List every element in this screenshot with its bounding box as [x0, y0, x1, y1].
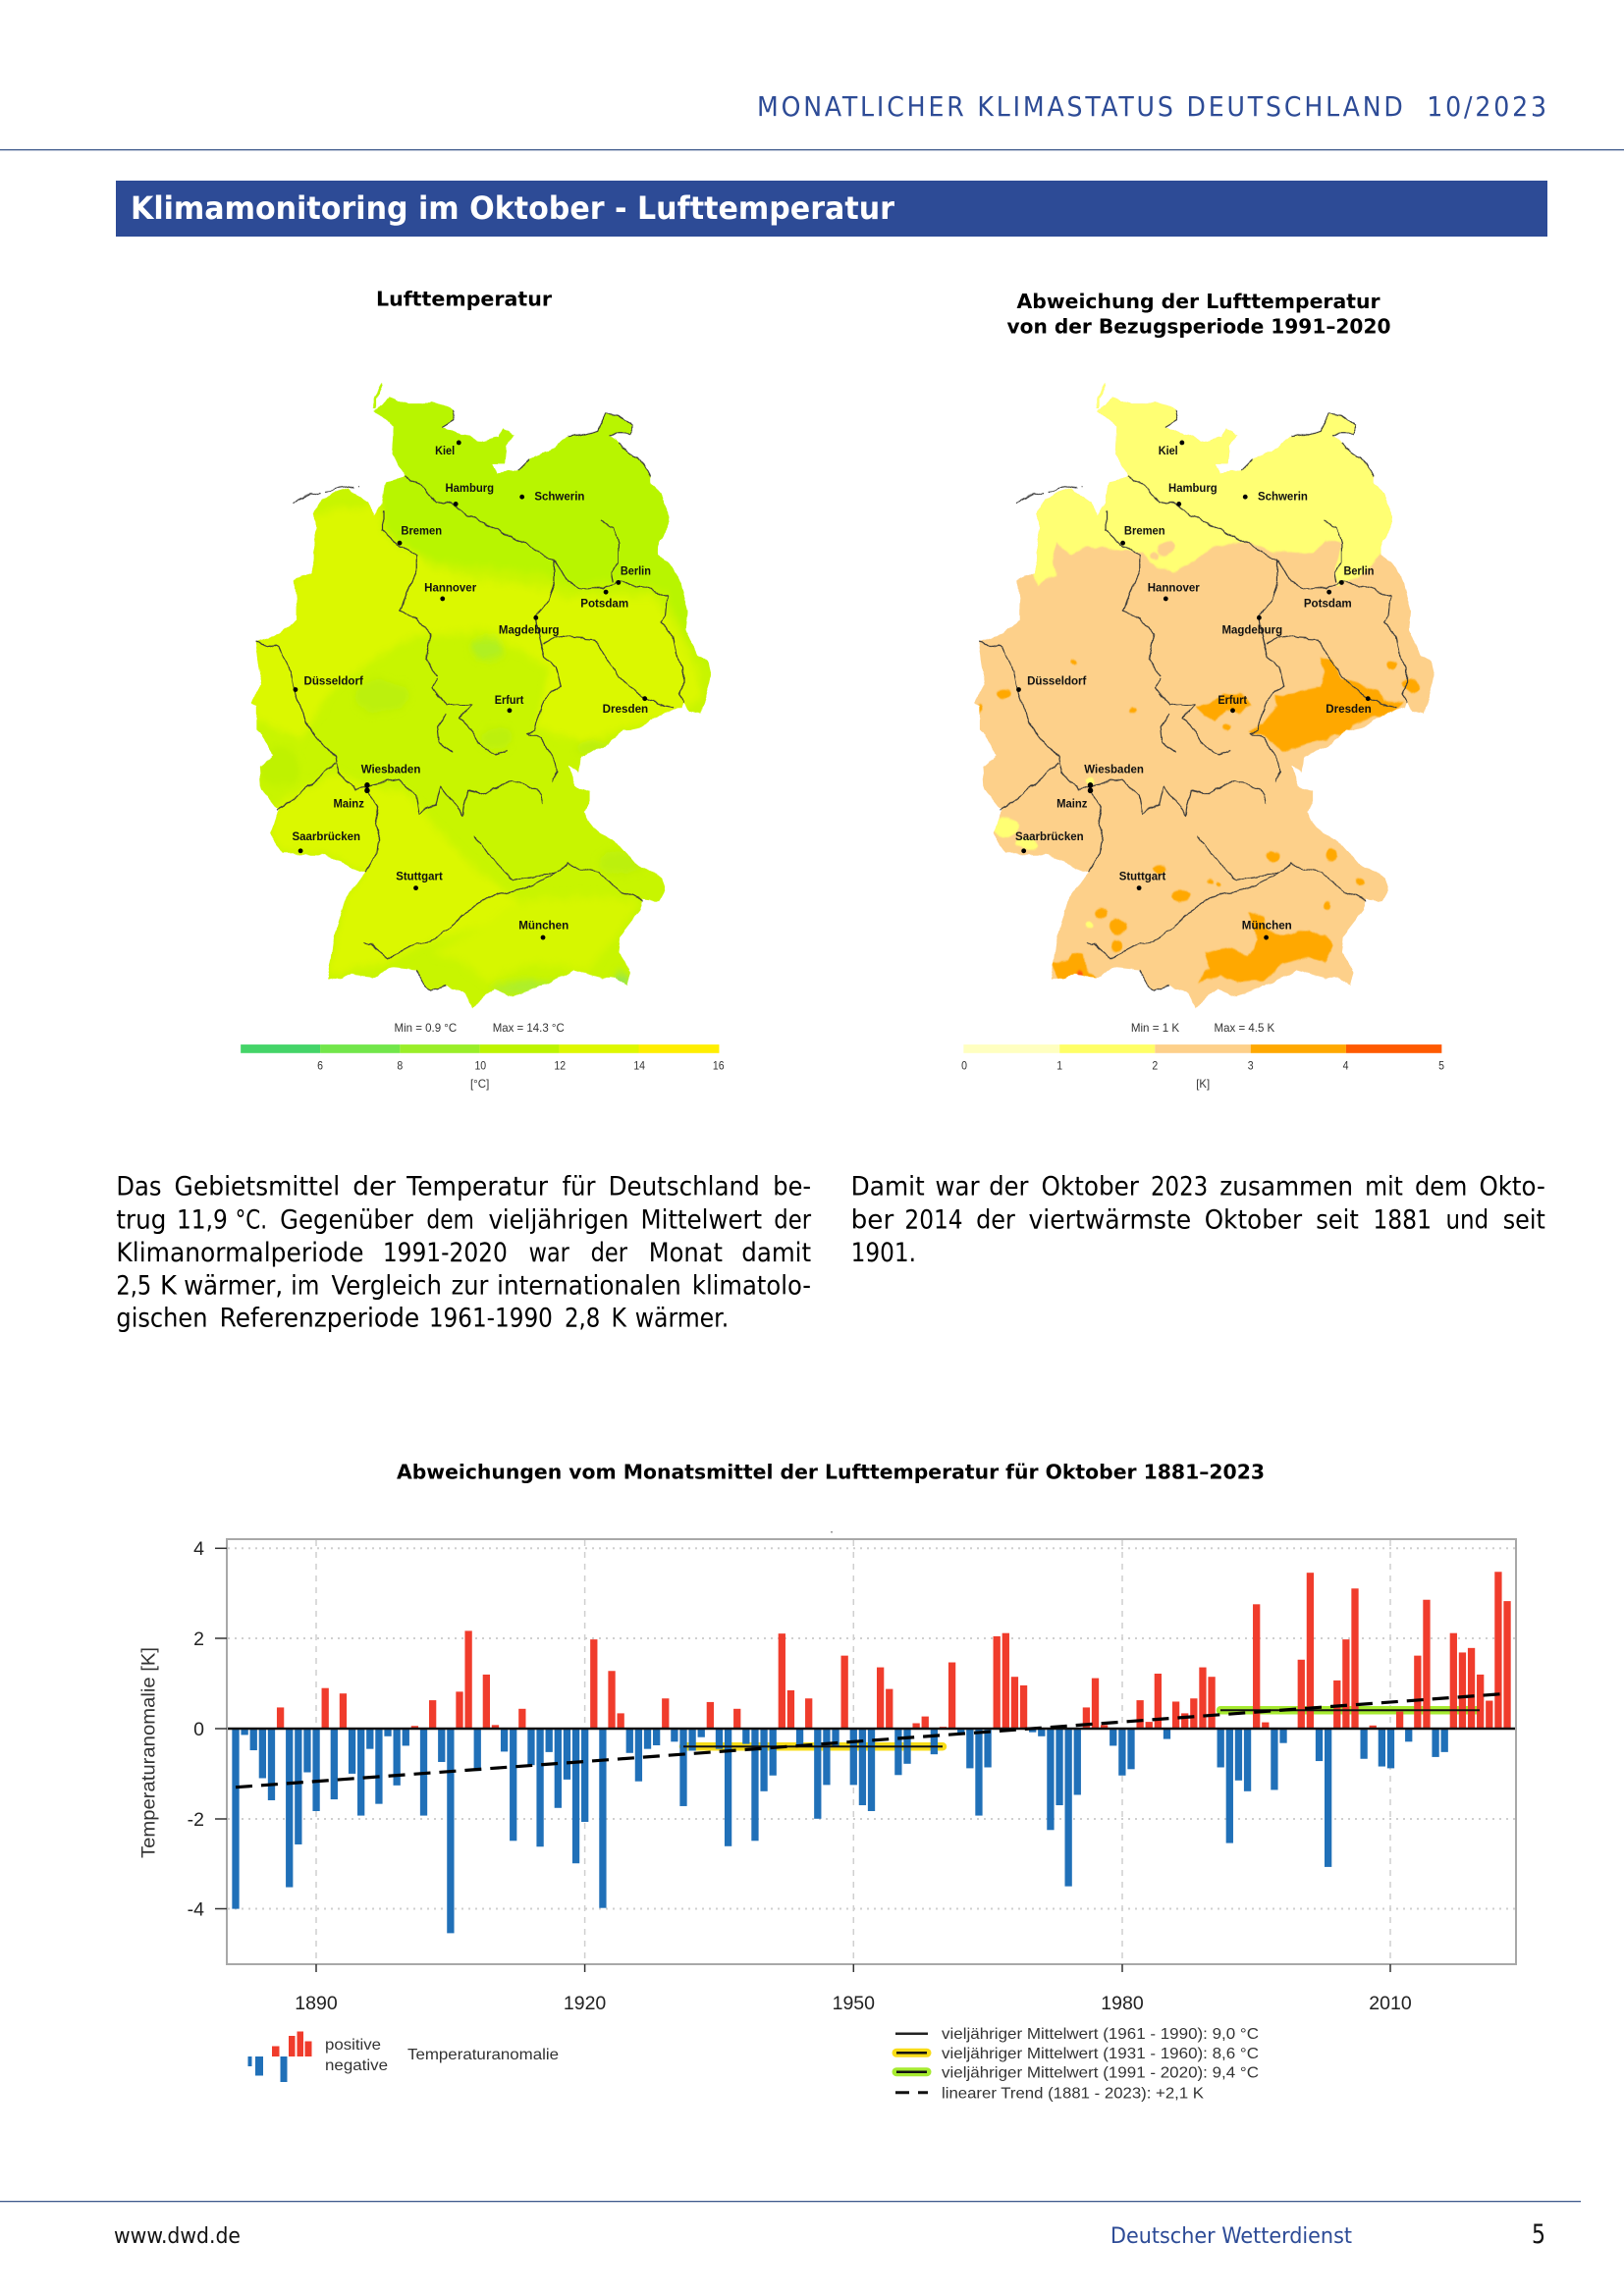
text block: right column: Oktober: [1205, 1204, 1303, 1235]
legend: bar colours: [247, 2032, 559, 2082]
city markers and labels: Düsseldorf: [1027, 674, 1087, 688]
city markers and labels: Düsseldorf: [304, 674, 363, 688]
text block: left column: im: [291, 1270, 319, 1301]
city markers and labels: Magdeburg: [1221, 623, 1282, 637]
city markers and labels: München: [1242, 919, 1292, 933]
city markers and labels: Mainz: [1056, 797, 1087, 811]
map title: Lufttemperatur: Lufttemperatur: [376, 287, 553, 310]
text block: left column: 2,8: [565, 1303, 600, 1333]
text block: left column: 1961-1990: [429, 1303, 553, 1333]
y axis labels: -2: [188, 1809, 204, 1831]
x axis labels: 1980: [1101, 1993, 1144, 2014]
min and max values: Max = 4.5 K: [1215, 1023, 1275, 1035]
text block: left column: Gebietsmittel: [175, 1171, 340, 1201]
text block: left column: Klimanormalperiode: [116, 1238, 363, 1267]
bar chart: temperature anomalies: [139, 1531, 1516, 2014]
city markers and labels: Stuttgart: [1119, 870, 1166, 883]
city markers and labels: Mainz: [334, 797, 364, 811]
city markers and labels: Saarbrücken: [292, 830, 360, 844]
y axis labels: 2: [193, 1629, 204, 1650]
text block: left column: trug: [116, 1204, 166, 1235]
colour scale in degrees Celsius: 6: [317, 1060, 323, 1073]
text block: right column: und: [1446, 1204, 1489, 1235]
text block: left column: 2,5: [116, 1270, 151, 1301]
city markers and labels: Kiel: [1159, 445, 1178, 458]
city markers and labels: Dresden: [603, 703, 648, 717]
text block: right column: seit: [1316, 1204, 1359, 1235]
legend: bar colours: Temperaturanomalie: [407, 2047, 559, 2063]
colour scale in degrees Celsius: [241, 1044, 725, 1092]
colour scale in degrees Celsius: [°C]: [470, 1079, 489, 1092]
axis ticks: [215, 1548, 1390, 1972]
coloured bands behind the long-term means: [683, 1710, 1480, 1746]
section heading bar: [116, 181, 1547, 237]
text block: left column: der: [774, 1204, 812, 1235]
text block: left column: K: [612, 1303, 628, 1333]
legend: bar colours: negative: [325, 2057, 388, 2074]
city markers and labels: Berlin: [621, 564, 651, 578]
text block: right column: 1901.: [851, 1238, 916, 1267]
city markers and labels: Stuttgart: [396, 870, 443, 883]
plot frame: [227, 1539, 1516, 1964]
positive bars: [277, 1572, 1511, 1729]
legend: bar colours: positive: [325, 2037, 381, 2054]
grid lines: [228, 1540, 1515, 1963]
city markers and labels: Kiel: [435, 445, 455, 458]
min and max values: [1131, 1023, 1275, 1035]
min and max values: Max = 14.3 °C: [493, 1023, 565, 1035]
text block: right column: 2023: [1151, 1171, 1208, 1201]
x axis labels: 2010: [1369, 1993, 1412, 2014]
map: temperature deviation: [962, 383, 1443, 1090]
text block: left column: Deutschland: [609, 1171, 760, 1201]
text block: left column: be-: [773, 1171, 811, 1201]
x axis labels: 1890: [295, 1993, 338, 2014]
text block: right column: war: [935, 1171, 980, 1201]
map title: Abweichung: Abweichung der Lufttemperatur: [1017, 290, 1380, 313]
text block: left column: damit: [741, 1238, 811, 1267]
text block: left column: wärmer.: [635, 1303, 729, 1333]
text block: left column: Vergleich: [332, 1270, 442, 1301]
text block: right column: 2014: [904, 1204, 963, 1235]
text block: left column: 1991-2020: [383, 1238, 508, 1267]
map: air temperature: [241, 383, 725, 1090]
min and max values: [394, 1023, 565, 1035]
colour scale in Kelvin: 5: [1438, 1060, 1444, 1073]
text block: left column: war: [529, 1238, 569, 1267]
min and max values: Min = 1 K: [1131, 1023, 1179, 1035]
text block: left column: Referenzperiode: [220, 1303, 419, 1333]
text block: left column: Mittelwert: [641, 1204, 762, 1235]
map title: Abweichung: [1007, 290, 1390, 338]
colour scale in Kelvin: 3: [1248, 1060, 1254, 1073]
colour scale in degrees Celsius: 12: [554, 1060, 567, 1073]
text block: left column: klimatolo-: [692, 1270, 811, 1301]
text block: left column: dem: [426, 1204, 474, 1235]
city markers and labels: Wiesbaden: [1084, 763, 1144, 776]
text block: left column: vieljährigen: [488, 1204, 628, 1235]
text block: right column: mit: [1365, 1171, 1403, 1201]
colour scale in degrees Celsius: 8: [397, 1060, 404, 1073]
legend: reference lines: vieljähriger Mittelwert (1961 - 1990): 9,0 °C: [942, 2026, 1259, 2043]
section heading bar: Klimamonitoring im Oktober - Lufttemperatur: [131, 189, 895, 227]
text block: right column: seit: [1503, 1204, 1545, 1235]
city markers and labels: Magdeburg: [499, 623, 560, 637]
colour scale in Kelvin: 0: [961, 1060, 967, 1073]
footer: [0, 2201, 1581, 2250]
text block: left column: gischen: [116, 1303, 207, 1333]
city markers and labels: München: [518, 919, 568, 933]
text block: right column: Okto-: [1479, 1171, 1545, 1201]
text block: left column: wärmer,: [184, 1270, 283, 1301]
city markers and labels: Hamburg: [446, 481, 494, 495]
city markers and labels: Saarbrücken: [1015, 830, 1084, 844]
text block: right column: der: [989, 1171, 1029, 1201]
x axis labels: [295, 1993, 1412, 2014]
city markers and labels: Schwerin: [1258, 490, 1308, 504]
min and max values: Min = 0.9 °C: [394, 1023, 457, 1035]
footer: 5: [1532, 2219, 1545, 2250]
colour scale in Kelvin: [K]: [1196, 1079, 1210, 1092]
colour scale in degrees Celsius: 10: [474, 1060, 487, 1073]
city markers and labels: Hamburg: [1168, 481, 1218, 495]
map title: Abweichung: von der Bezugsperiode 1991–2020: [1007, 314, 1390, 338]
city markers and labels: Wiesbaden: [361, 763, 420, 776]
negative bars: [232, 1729, 1448, 1933]
text block: left column: Monat: [649, 1238, 723, 1267]
city markers and labels: Potsdam: [580, 597, 628, 611]
x axis labels: 1920: [564, 1993, 606, 2014]
city markers and labels: Potsdam: [1304, 597, 1352, 611]
city markers and labels: Erfurt: [1218, 694, 1247, 708]
zero line: [227, 1728, 1516, 1730]
legend: reference lines: linearer Trend (1881 - 2023): +2,1 K: [942, 2085, 1204, 2103]
text block: left column: Gegenüber: [280, 1204, 413, 1235]
text block: left column: Temperatur: [406, 1171, 549, 1201]
city markers and labels: Hannover: [1148, 581, 1200, 595]
linear trend: [236, 1693, 1506, 1788]
chart title: Abweichungen vom Monatsmittel der Lufttemperatur für Oktober 1881–2023: [397, 1461, 1265, 1484]
footer: Deutscher Wetterdienst: [1110, 2224, 1352, 2249]
text block: right column: [851, 1171, 1545, 1267]
city markers and labels: Hannover: [424, 581, 476, 595]
text block: left column: der: [352, 1171, 396, 1201]
colour scale in Kelvin: 4: [1343, 1060, 1349, 1073]
y axis labels: [188, 1538, 204, 1920]
text block: right column: Oktober: [1042, 1171, 1139, 1201]
legend: reference lines: [895, 2026, 1259, 2103]
text block: left column: internationalen: [497, 1270, 681, 1301]
text block: right column: zusammen: [1219, 1171, 1353, 1201]
text block: left column: Das: [116, 1171, 161, 1201]
colour scale in Kelvin: 1: [1056, 1060, 1063, 1073]
header: publication title: MONATLICHER KLIMASTATUS DEUTSCHLAND 10/2023: [757, 90, 1546, 123]
city markers and labels: [292, 441, 651, 939]
colour scale in degrees Celsius: 16: [713, 1060, 725, 1073]
city markers and labels: Bremen: [401, 524, 442, 538]
text block: left column: K: [160, 1270, 179, 1301]
text block: left column: für: [563, 1171, 596, 1201]
city markers and labels: Dresden: [1326, 703, 1372, 717]
y axis labels: 0: [193, 1719, 204, 1740]
y axis title: Temperaturanomalie [K]: [139, 1647, 159, 1858]
y axis labels: 4: [193, 1538, 204, 1560]
colour scale in Kelvin: [961, 1044, 1444, 1092]
text block: right column: 1881: [1373, 1204, 1432, 1235]
city markers and labels: Berlin: [1343, 564, 1374, 578]
text block: right column: dem: [1415, 1171, 1467, 1201]
text block: right column: viertwärmste: [1028, 1204, 1191, 1235]
text block: left column: 11,9: [177, 1204, 228, 1235]
long-term mean lines: [683, 1710, 1480, 1746]
city markers and labels: Schwerin: [534, 490, 584, 504]
footer: www.dwd.de: [114, 2224, 241, 2249]
text block: left column: zur: [452, 1270, 489, 1301]
y axis labels: -4: [188, 1898, 204, 1920]
city markers and labels: Bremen: [1124, 524, 1165, 538]
colour scale in degrees Celsius: 14: [633, 1060, 645, 1073]
city markers and labels: [1015, 441, 1374, 939]
text block: left column: °C.: [236, 1204, 267, 1235]
legend: reference lines: vieljähriger Mittelwert (1991 - 2020): 9,4 °C: [942, 2065, 1259, 2081]
text block: left column: der: [591, 1238, 627, 1267]
legend: reference lines: vieljähriger Mittelwert (1931 - 1960): 8,6 °C: [942, 2046, 1259, 2062]
city markers and labels: Erfurt: [495, 694, 524, 708]
colour scale in Kelvin: 2: [1152, 1060, 1159, 1073]
text block: right column: Damit: [851, 1171, 925, 1201]
x axis labels: 1950: [833, 1993, 875, 2014]
text block: right column: der: [976, 1204, 1015, 1235]
text block: right column: ber: [851, 1204, 894, 1235]
text block: left column: [116, 1171, 812, 1333]
